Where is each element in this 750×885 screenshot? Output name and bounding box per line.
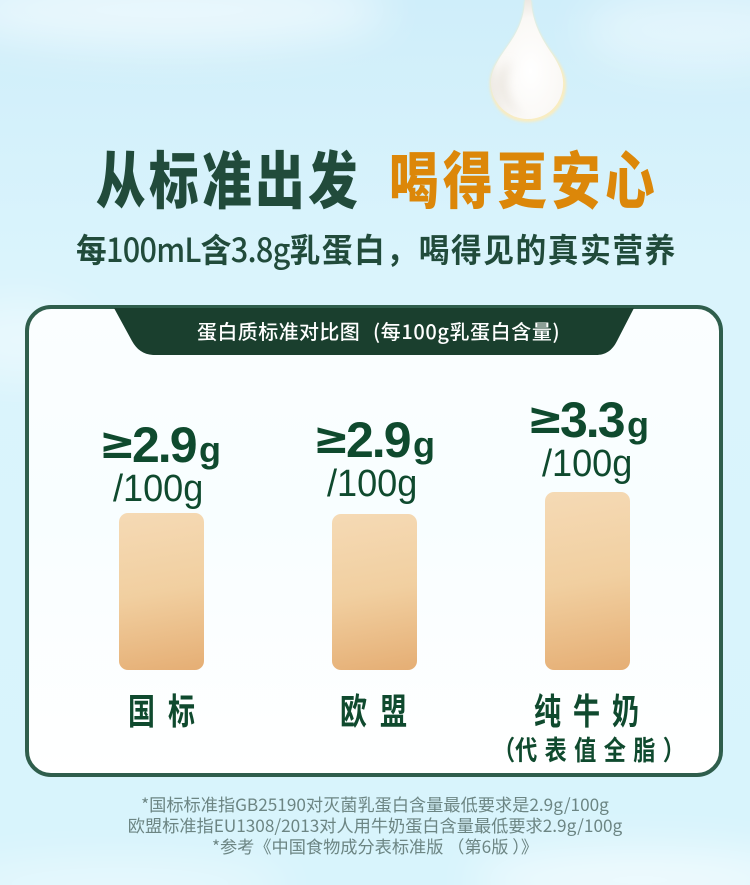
value: g bbox=[199, 429, 221, 470]
column: pure milk bbox=[493, 392, 692, 768]
subtitle: 每100mL含3.8g乳蛋白，喝得见的真实营养 bbox=[76, 224, 677, 272]
bar bbox=[545, 492, 630, 670]
bar bbox=[118, 513, 204, 670]
label: 欧盟 bbox=[340, 683, 420, 735]
footnote line 3: *参考《中国食物成分表标准版 （第6版 ）》 bbox=[212, 833, 538, 858]
unit: /100g bbox=[542, 443, 632, 485]
panel header tab bbox=[114, 308, 634, 355]
title: orange part: 喝得更安心 bbox=[389, 131, 659, 221]
value: ≥ bbox=[527, 393, 564, 444]
footnote line 2: 欧盟标准指EU1308/2013对人用牛奶蛋白含量最低要求2.9g/100g bbox=[128, 812, 622, 837]
value: 2.9 bbox=[346, 412, 410, 468]
bar bbox=[332, 514, 417, 670]
value bbox=[313, 412, 435, 468]
header unit note: (每100g乳蛋白含量) bbox=[373, 316, 560, 345]
unit: /100g bbox=[327, 463, 417, 505]
column: EU standard bbox=[313, 412, 435, 735]
panel header text bbox=[197, 316, 560, 345]
value: g bbox=[413, 424, 435, 465]
footnotes bbox=[128, 791, 622, 858]
value: 2.9 bbox=[132, 417, 196, 473]
value: ≥ bbox=[99, 418, 136, 469]
column: national standard bbox=[99, 417, 221, 735]
title: green part: 从标准出发 bbox=[96, 131, 361, 221]
value bbox=[527, 392, 649, 448]
value: g bbox=[627, 404, 649, 445]
title bbox=[25, 131, 723, 766]
label: 纯牛奶 bbox=[534, 683, 651, 735]
value bbox=[99, 417, 221, 473]
icon: milk drop bbox=[488, 0, 568, 124]
value: 3.3 bbox=[560, 392, 624, 448]
unit: /100g bbox=[113, 468, 203, 510]
label: 国标 bbox=[128, 683, 208, 735]
header title: 蛋白质标准对比图 bbox=[197, 316, 360, 345]
sublabel: （代表值全脂） bbox=[493, 729, 692, 768]
panel: protein comparison bbox=[25, 305, 723, 777]
footnote line 1: *国标标准指GB25190对灭菌乳蛋白含量最低要求是2.9g/100g bbox=[141, 791, 609, 816]
value: ≥ bbox=[313, 413, 350, 464]
